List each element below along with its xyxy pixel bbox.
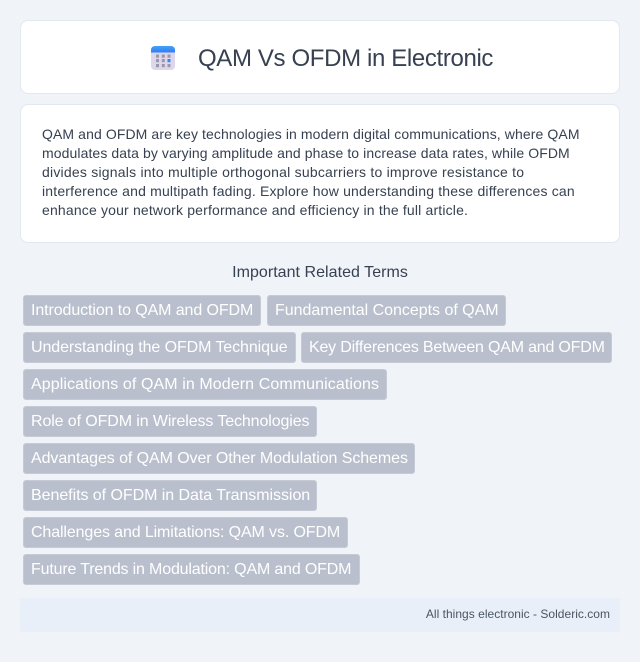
title: QAM Vs OFDM in Electronic [198, 45, 493, 72]
tag [23, 517, 348, 548]
tag: Applications of QAM in Modern Communications [31, 376, 379, 393]
tag: Advantages of QAM Over Other Modulation Schemes [31, 450, 408, 467]
tag [23, 332, 296, 363]
tag [23, 295, 261, 326]
tag [301, 332, 612, 363]
tag: Fundamental Concepts of QAM [275, 302, 499, 319]
tag [23, 443, 415, 474]
intro text: QAM and OFDM are key technologies in modern digital communications, where QAM [42, 126, 580, 142]
intro panel [20, 104, 620, 243]
header panel [20, 20, 620, 94]
tag: Benefits of OFDM in Data Transmission [31, 487, 310, 504]
related terms tags [23, 295, 612, 585]
footer bar [20, 598, 620, 632]
tag: Role of OFDM in Wireless Technologies [31, 413, 309, 430]
tag: Understanding the OFDM Technique [31, 339, 288, 356]
tag: Key Differences Between QAM and OFDM [309, 339, 605, 356]
footer text: All things electronic - Solderic.com [426, 607, 610, 621]
related terms heading: Important Related Terms [232, 264, 408, 281]
tag [23, 480, 317, 511]
intro text: divides signals into multiple orthogonal subcarriers to improve resistance to [42, 164, 524, 180]
tag: Future Trends in Modulation: QAM and OFDM [31, 561, 351, 578]
tag: Challenges and Limitations: QAM vs. OFDM [31, 524, 340, 541]
intro text [42, 126, 580, 218]
tag [23, 406, 317, 437]
tag [267, 295, 506, 326]
intro text: enhance your network performance and efficiency in the full article. [42, 202, 468, 218]
tag [23, 554, 360, 585]
intro text: interference and multipath fading. Explore how understanding these differences can [42, 183, 575, 199]
tag: Introduction to QAM and OFDM [31, 302, 253, 319]
tag [23, 369, 387, 400]
intro text: modulates data by varying amplitude and phase to increase data rates, while OFDM [42, 145, 570, 161]
icon: calendar [151, 46, 175, 70]
